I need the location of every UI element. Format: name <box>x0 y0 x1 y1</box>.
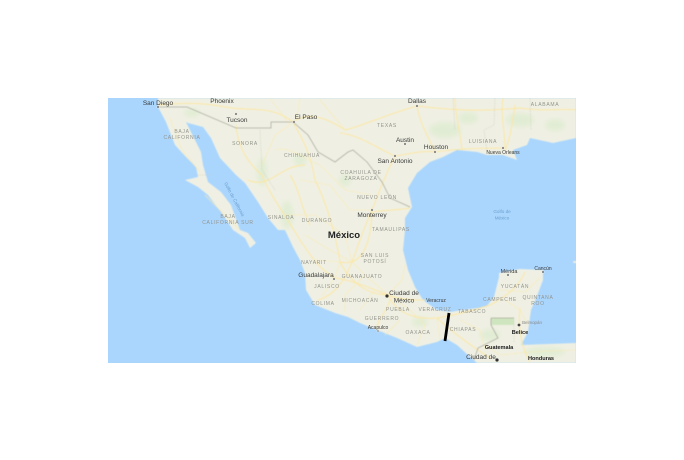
map <box>108 98 577 363</box>
Mexico cities: Ciudad de <box>389 290 419 297</box>
state labels: ZARAGOZA <box>344 176 378 182</box>
black line <box>445 313 449 341</box>
Mexico cities: Acapulco <box>368 325 388 331</box>
small island <box>573 261 577 263</box>
state labels: COLIMA <box>311 301 335 307</box>
US cities: Dallas <box>408 98 427 105</box>
state labels: TEXAS <box>377 123 397 129</box>
Mexico cities <box>298 212 554 362</box>
US cities: Austin <box>396 137 414 144</box>
state labels: GUERRERO <box>365 316 399 322</box>
Mexico cities: Ciudad de <box>466 354 496 361</box>
state labels: YUCATÁN <box>501 283 529 290</box>
state labels: NUEVO LEÓN <box>357 194 397 201</box>
state labels: BAJA <box>174 129 190 135</box>
state labels: SINALOA <box>268 215 294 221</box>
water labels: México <box>495 216 510 220</box>
Mexico cities: México <box>394 298 415 304</box>
state labels: TABASCO <box>458 309 486 315</box>
state labels: OAXACA <box>405 330 431 336</box>
state labels: QUINTANA <box>522 295 554 301</box>
guatemala peten <box>491 318 514 325</box>
US cities: Houston <box>424 144 448 151</box>
Mexico cities: Belice <box>512 330 528 336</box>
Mexico cities: Veracruz <box>426 298 446 304</box>
state labels: LUISIANA <box>469 139 497 145</box>
US cities: El Paso <box>295 114 318 121</box>
state labels: CHIHUAHUA <box>284 153 320 159</box>
state labels: MICHOACÁN <box>342 297 378 304</box>
Mexico cities: Belmopán <box>522 320 542 325</box>
US cities <box>143 98 520 165</box>
state labels: ROO <box>531 301 545 307</box>
Mexico cities: Monterrey <box>357 212 387 219</box>
state labels: VERACRUZ <box>418 307 452 313</box>
state labels: GUANAJUATO <box>342 274 382 280</box>
roads <box>158 98 576 362</box>
minor roads <box>170 98 576 355</box>
water labels: Golfo de <box>493 209 511 214</box>
state labels: CALIFORNIA SUR <box>202 220 254 226</box>
US cities: San Antonio <box>377 158 413 165</box>
state labels: BAJA <box>220 214 236 220</box>
Mexico cities: Guadalajara <box>298 272 334 279</box>
US cities: Nueva Orleans <box>486 150 520 156</box>
Mexico cities: Mérida <box>501 269 518 275</box>
water labels: Golfo de California <box>223 181 246 218</box>
state labels <box>163 102 559 336</box>
state labels: CALIFORNIA <box>163 135 201 141</box>
US cities: Tucson <box>226 117 248 124</box>
state labels: SAN LUIS <box>361 253 389 259</box>
state labels: SONORA <box>232 141 258 147</box>
city markers <box>157 105 544 362</box>
water labels <box>223 181 511 220</box>
state labels: COAHUILA DE <box>340 170 382 176</box>
US cities: San Diego <box>143 100 174 107</box>
state labels: TAMAULIPAS <box>372 227 410 233</box>
state labels: DURANGO <box>302 218 332 224</box>
green areas <box>184 109 565 357</box>
state labels: CAMPECHE <box>483 297 517 303</box>
Mexico cities: Honduras <box>528 356 554 362</box>
landmass <box>158 98 577 363</box>
state labels: NAYARIT <box>301 260 327 266</box>
ocean <box>108 98 576 363</box>
Mexico cities: Guatemala <box>485 345 514 351</box>
state and country borders <box>158 107 514 360</box>
US cities: Phoenix <box>210 98 234 105</box>
state labels: CHIAPAS <box>450 327 476 333</box>
state labels: ALABAMA <box>531 102 559 108</box>
state labels: PUEBLA <box>386 307 410 313</box>
labels <box>143 98 559 362</box>
state labels: JALISCO <box>314 284 340 290</box>
Mexico cities: Cancún <box>534 266 552 272</box>
state labels: POTOSÍ <box>363 258 387 265</box>
Mexico cities: México <box>328 230 360 241</box>
